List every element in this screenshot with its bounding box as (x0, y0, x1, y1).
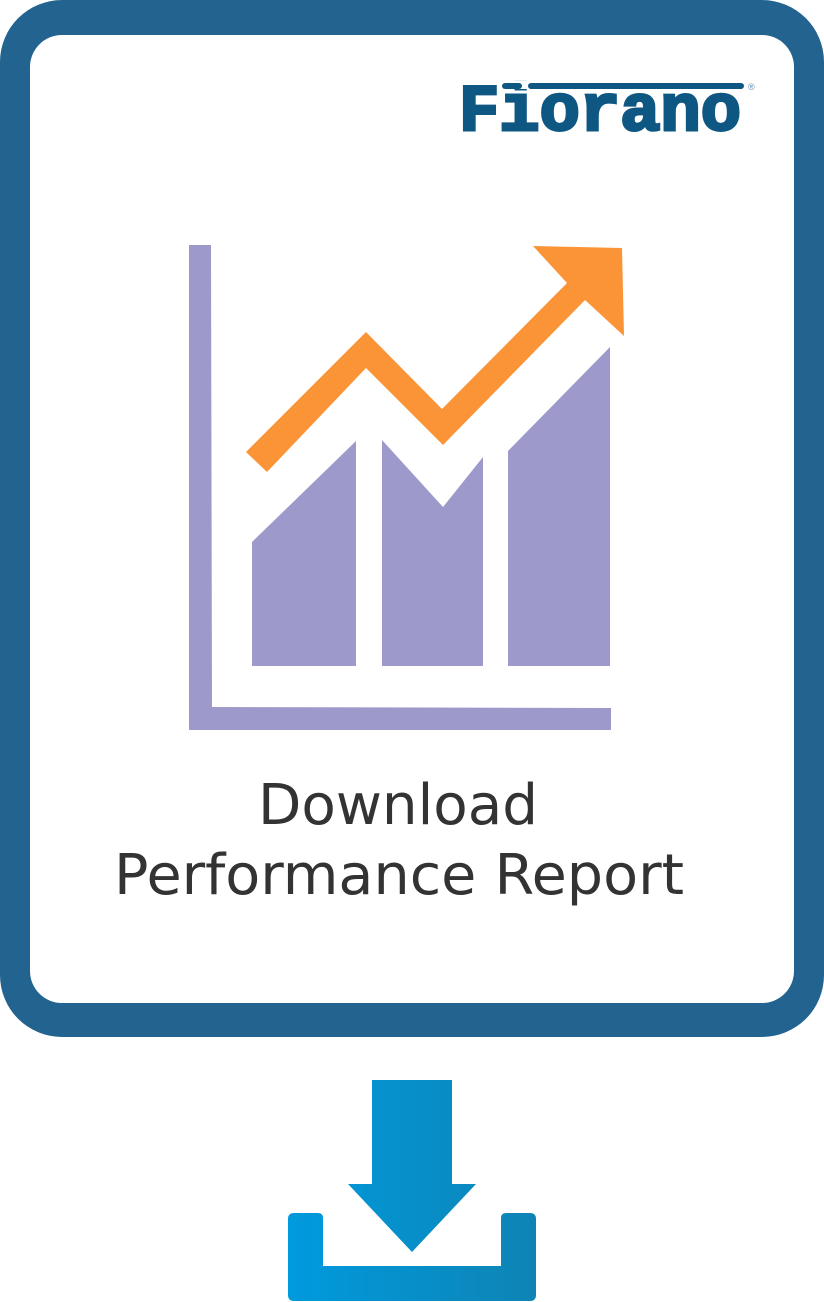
chart icon: performance growth (189, 245, 624, 730)
download tray (288, 1213, 536, 1301)
heading: download performance report: Download (258, 773, 538, 838)
chart axes (189, 245, 611, 730)
panel: report card (0, 0, 824, 1037)
logo: Fiorano: Fiorano (459, 75, 741, 150)
trend arrow (246, 246, 624, 472)
logo: Fiorano: ® (748, 82, 755, 92)
heading: download performance report (114, 773, 684, 908)
download arrow (348, 1080, 476, 1252)
icon: download (288, 1080, 536, 1301)
bar 2 (382, 440, 483, 666)
heading: download performance report: Performance Report (114, 843, 684, 908)
bar 3 (508, 347, 610, 666)
bar 1 (252, 441, 356, 666)
